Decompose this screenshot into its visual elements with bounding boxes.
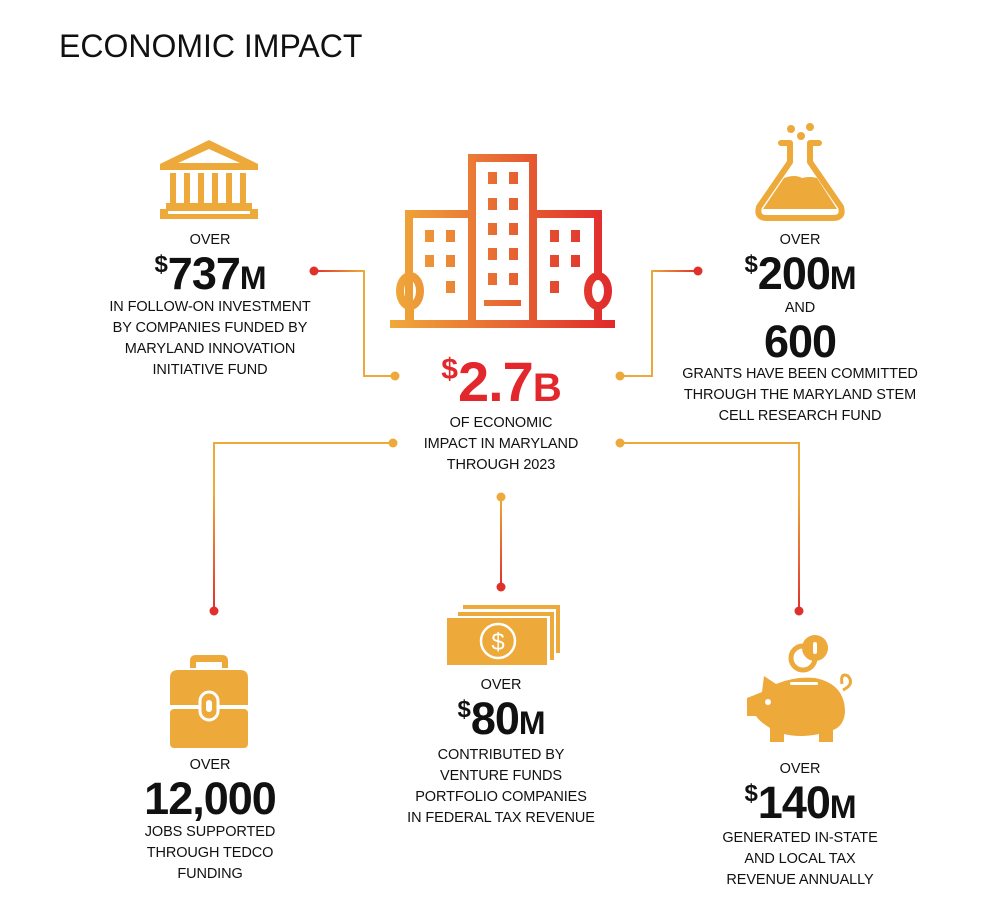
connector lines: [214, 271, 799, 611]
stat: 200M and 600: AND: [785, 300, 815, 316]
stat: 140M: [722, 761, 878, 888]
stat: 80M: CONTRIBUTED BY: [438, 747, 564, 763]
icon: money: [447, 605, 560, 665]
stat: 737M: [109, 232, 311, 378]
stat: 12,000 jobs: FUNDING: [177, 866, 243, 882]
stat: 80M: VENTURE FUNDS: [440, 768, 562, 784]
stat: 140M: OVER: [780, 761, 820, 777]
stat: 200M and 600: [682, 232, 918, 424]
icon: piggy bank: [747, 635, 851, 742]
icon: flask: [758, 123, 842, 218]
stat: 140M: REVENUE ANNUALLY: [726, 872, 874, 888]
stat: 737M: INITIATIVE FUND: [152, 362, 268, 378]
icon: money: $: [491, 629, 505, 656]
title: ECONOMIC IMPACT: [59, 28, 362, 64]
stat: 200M and 600: $200M: [744, 248, 856, 299]
stat: 200M and 600: THROUGH THE MARYLAND STEM: [684, 387, 916, 403]
stat: 737M: BY COMPANIES FUNDED BY: [113, 320, 307, 336]
stat: 12,000 jobs: [144, 757, 276, 882]
stat: 12,000 jobs: THROUGH TEDCO: [147, 845, 273, 861]
stat: 737M: OVER: [190, 232, 230, 248]
stat: 2.7B center: [424, 350, 578, 473]
stat: 2.7B center: $2.7B: [441, 350, 561, 413]
stat: 12,000 jobs: JOBS SUPPORTED: [145, 824, 275, 840]
stat: 200M and 600: 600: [764, 316, 836, 367]
stat: 80M: OVER: [481, 677, 521, 693]
stat: 140M: GENERATED IN-STATE: [722, 830, 878, 846]
stat: 737M: IN FOLLOW-ON INVESTMENT: [109, 299, 311, 315]
stat: 80M: IN FEDERAL TAX REVENUE: [407, 810, 595, 826]
stat: 200M and 600: OVER: [780, 232, 820, 248]
stat: 80M: [407, 677, 595, 826]
stat: 2.7B center: OF ECONOMIC: [450, 415, 552, 431]
stat: 200M and 600: GRANTS HAVE BEEN COMMITTED: [682, 366, 918, 382]
stat: 200M and 600: CELL RESEARCH FUND: [719, 408, 881, 424]
stat: 737M: MARYLAND INNOVATION: [125, 341, 295, 357]
icon: briefcase: [170, 655, 248, 748]
stat: 140M: $140M: [744, 777, 856, 828]
stat: 2.7B center: THROUGH 2023: [447, 457, 555, 473]
connector dots: [210, 266, 804, 616]
stat: 140M: AND LOCAL TAX: [744, 851, 856, 867]
stat: 2.7B center: IMPACT IN MARYLAND: [424, 436, 578, 452]
stat: 80M: PORTFOLIO COMPANIES: [415, 789, 587, 805]
icon: bank: [160, 140, 258, 219]
stat: 12,000 jobs: 12,000: [144, 773, 276, 824]
stat: 12,000 jobs: OVER: [190, 757, 230, 773]
stat: 737M: $737M: [154, 248, 266, 299]
stat: 80M: $80M: [457, 693, 545, 744]
icon: buildings: [390, 158, 615, 324]
